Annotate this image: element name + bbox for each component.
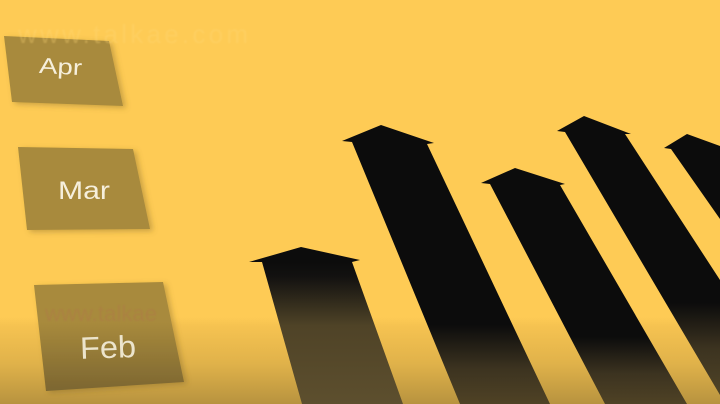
arrow: fourth bbox=[557, 116, 720, 395]
arrow: fifth bbox=[664, 134, 720, 219]
panel: Mar bbox=[18, 147, 150, 230]
watermark on Feb panel: www.talkae bbox=[44, 301, 157, 326]
label: Mar: Mar bbox=[58, 177, 110, 205]
label: Apr: Apr bbox=[38, 53, 83, 80]
panel: Feb bbox=[34, 282, 184, 391]
arrow: second bbox=[342, 125, 550, 404]
arrow: first bbox=[249, 247, 403, 404]
watermark: www.talkae.com bbox=[17, 19, 248, 49]
arrow: third bbox=[481, 168, 687, 404]
label: Feb: Feb bbox=[79, 329, 137, 366]
panel: Apr bbox=[4, 36, 123, 106]
